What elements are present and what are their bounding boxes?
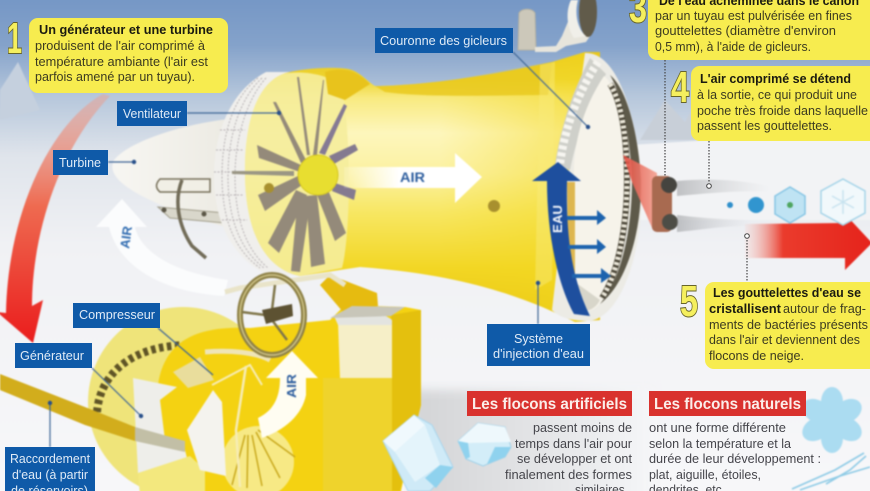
red arrow right: [745, 214, 870, 270]
gear ring: [555, 58, 606, 170]
step 1 number: 1: [7, 14, 22, 63]
label: Turbine: Turbine: [59, 156, 101, 170]
text: naturels: selon la température et la: [649, 436, 792, 451]
generator tick ring: [97, 345, 190, 412]
step 5 box: [705, 282, 870, 369]
text: naturels: plat, aiguille, étoiles,: [649, 467, 761, 482]
text: artificiels: [505, 420, 633, 491]
dotted leaders: [665, 60, 747, 282]
label: Raccordement d'eau: [5, 447, 95, 491]
step 5 box: cristallisent: [709, 302, 782, 316]
step 3: [629, 0, 870, 60]
step 4 box: poche très froide dans laquelle: [697, 103, 868, 118]
red arrow: air to generator: [0, 94, 110, 343]
label: Générateur: Générateur: [20, 349, 84, 363]
leader end circles: [707, 184, 749, 238]
text: naturels: ont une forme différente: [649, 420, 786, 435]
white AIR arrow: AIR: [400, 170, 425, 185]
compressor fan: [173, 351, 295, 491]
text: artificiels: finalement des formes: [505, 467, 632, 482]
EAU blue arrow: EAU: [550, 205, 565, 233]
red cold cone: [623, 155, 657, 232]
nozzle head: [652, 176, 678, 232]
spray streaks: [677, 180, 770, 232]
text: artificiels: passent moins de: [533, 420, 632, 435]
step 4 number: 4: [671, 63, 689, 112]
step 5 box: dans l'air et deviennent des: [709, 332, 860, 347]
water jets: [567, 210, 611, 283]
step 1 box: parfois amené par un tuyau).: [35, 69, 195, 84]
heading: Les flocons naturels: [649, 391, 806, 416]
turbine: [112, 118, 240, 258]
label: Turbine: [53, 150, 108, 175]
icon: needle crystals: [792, 453, 870, 490]
body band: [535, 62, 555, 290]
label: Couronne des gicleurs: [375, 28, 513, 53]
step 5: [680, 277, 870, 369]
label: Générateur: [15, 343, 92, 368]
label: Ventilateur: Ventilateur: [123, 107, 181, 121]
step 5 number: 5: [680, 277, 698, 326]
EAU blue arrow: [532, 162, 611, 316]
top gold band: [375, 62, 552, 96]
step 5 box: autour de frag-: [783, 301, 866, 316]
step 4 box: L'air comprimé se détend: [700, 72, 851, 86]
front rim: [552, 53, 642, 321]
rim interior: [572, 76, 630, 311]
mountains: [0, 62, 870, 220]
label: Système d'injection d'eau: [487, 324, 590, 366]
fan grille: [214, 72, 300, 275]
icon: natural snowflake: [798, 387, 866, 453]
leader lines: [50, 52, 588, 447]
step 5 box: flocons de neige.: [709, 348, 804, 363]
turbine fittings: [156, 179, 236, 258]
text: artificiels: se développer et ont: [517, 451, 632, 466]
heading: Les flocons artificiels: Les flocons artificiels: [472, 396, 627, 413]
label: Couronne des gicleurs: Couronne des gicleurs: [380, 34, 507, 48]
step 1 box: température ambiante (l'air est: [35, 54, 208, 69]
label: Raccordement d'eau: Raccordement: [10, 452, 90, 466]
heading: Les flocons naturels: Les flocons naturels: [654, 396, 801, 413]
top fittings: [518, 0, 597, 52]
cannon body: [245, 52, 600, 322]
step 4: [671, 63, 870, 141]
back section of drum: [245, 73, 349, 276]
white curved AIR arrow left: AIR: [117, 225, 135, 249]
text: naturels: [649, 420, 821, 491]
text: naturels: durée de leur développement :: [649, 451, 821, 466]
label: Raccordement d'eau: d'eau (à partir: [12, 468, 88, 482]
hand wheel: [225, 275, 345, 355]
generator window: [133, 378, 190, 473]
label: Système d'injection d'eau: Système: [514, 332, 563, 346]
step 1 box: [29, 18, 228, 93]
text: artificiels: temps dans l'air pour: [515, 436, 633, 451]
yellow wedge under window: [138, 456, 205, 491]
step 3 box: gouttelettes (diamètre d'environ: [655, 23, 836, 38]
water connection hose: [0, 374, 185, 452]
step 3 box: par un tuyau est pulvérisée en fines: [655, 8, 852, 23]
droplet to snowflake sequence: [727, 179, 865, 225]
white AIR arrow: [344, 153, 482, 203]
step 5 box: Les gouttelettes d'eau se: [713, 286, 861, 300]
label: Ventilateur: [117, 101, 187, 126]
step 5 box: ments de bactéries présents: [709, 317, 868, 332]
label: Compresseur: [73, 303, 160, 328]
label: Système d'injection d'eau: d'injection d'eau: [493, 347, 584, 361]
right body tint: [440, 52, 585, 322]
step 1: [7, 14, 228, 93]
generator disc: [88, 307, 278, 491]
step 3 box: 0,5 mm), à l'aide de gicleurs.: [655, 39, 811, 54]
icon: artificial crystal small: [458, 423, 511, 466]
white curved AIR arrow left: [96, 199, 228, 296]
icon: artificial crystal large: [383, 415, 453, 491]
step 1 box: produisent de l'air comprimé à: [35, 38, 206, 53]
step 4 box: [691, 66, 870, 141]
grey ground band: [412, 390, 652, 491]
base: yellow block: [157, 275, 421, 491]
heading: Les flocons artificiels: [467, 391, 632, 416]
ice specks in cannon: [264, 183, 500, 212]
step 4 box: à la sortie, ce qui produit une: [697, 87, 857, 102]
step 1 box: Un générateur et une turbine: [39, 23, 213, 37]
step 3 box: [648, 0, 870, 60]
step 4 box: passent les gouttelettes.: [697, 118, 832, 133]
fan hub: [298, 155, 338, 195]
white AIR arrow base: [258, 351, 318, 438]
label: Compresseur: Compresseur: [79, 308, 155, 322]
dark ring: [600, 75, 641, 304]
fan blades: [232, 77, 358, 272]
white AIR arrow base: AIR: [284, 373, 299, 398]
